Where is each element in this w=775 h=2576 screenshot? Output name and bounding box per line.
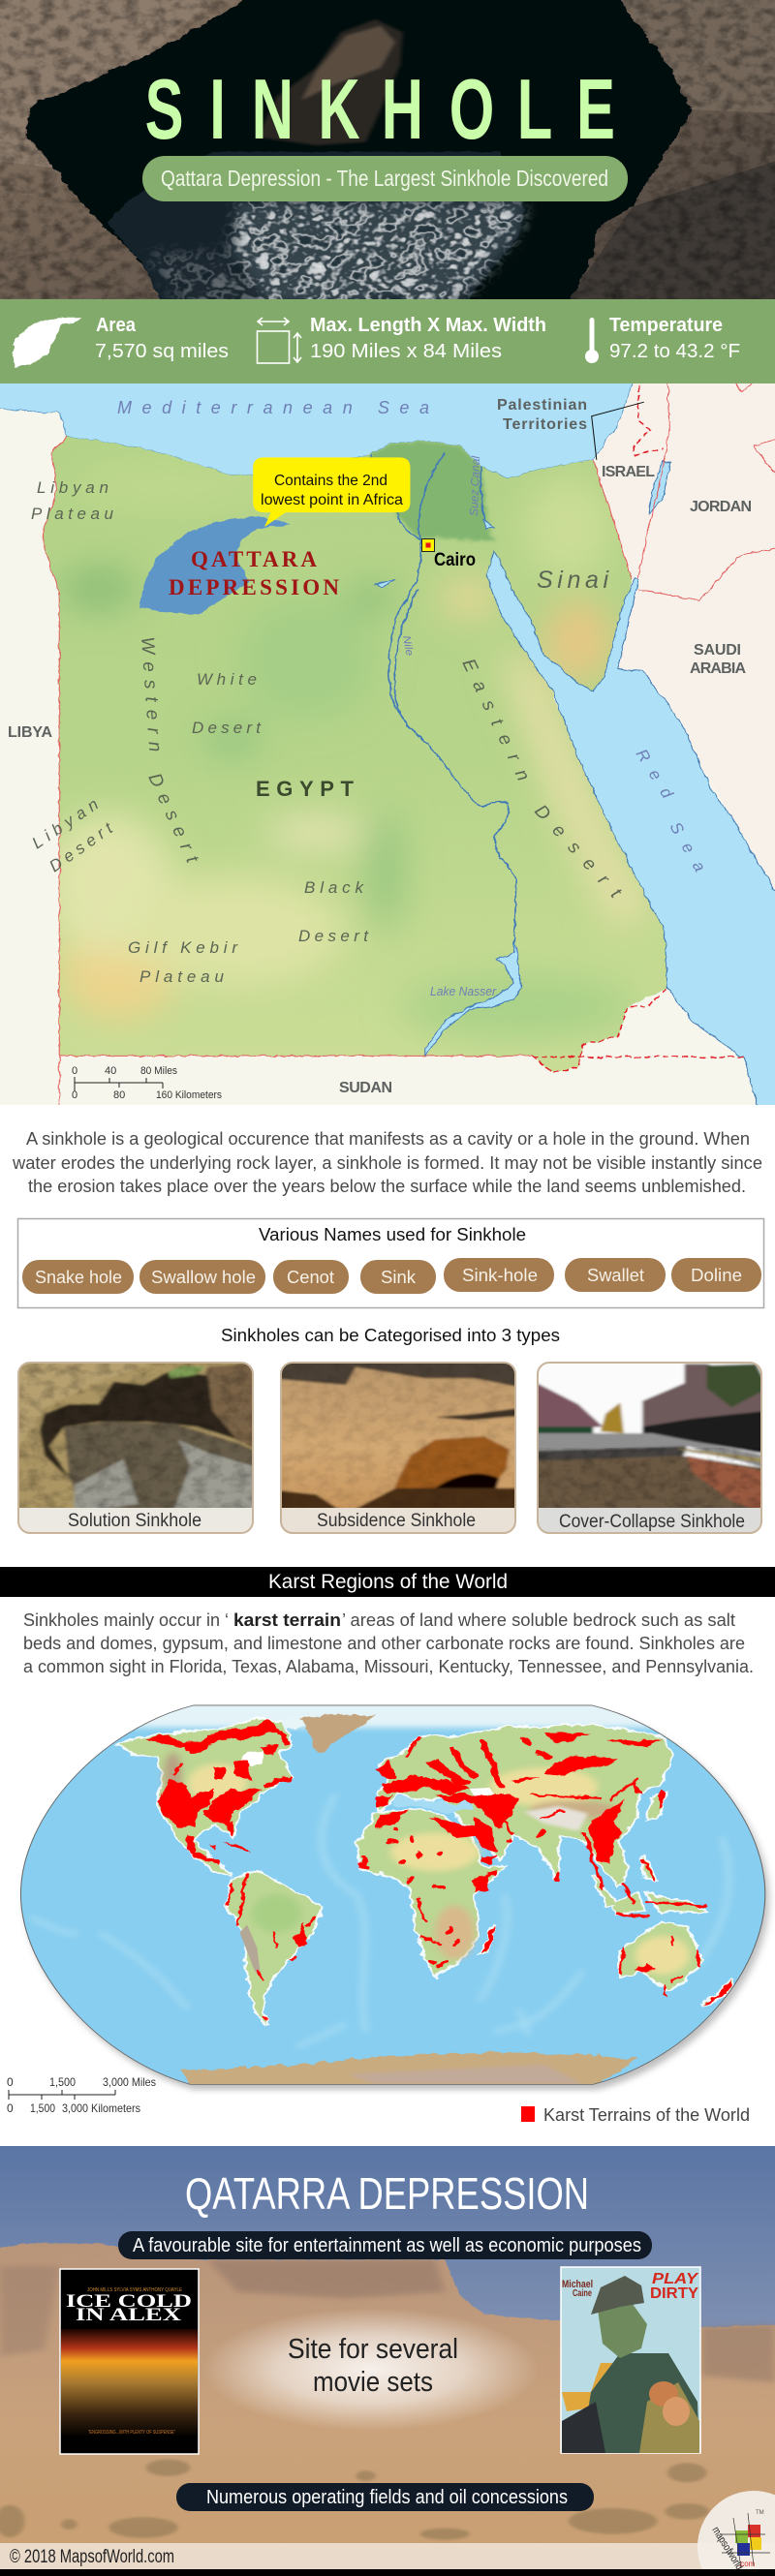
karst paragraph: ’ areas of land where soluble bedrock such as salt [342,1610,735,1630]
map labels: deserts and regions: White [197,670,257,689]
map labels: deserts and regions: Eastern [457,656,533,784]
name pills: Doline [691,1266,742,1285]
map base terrain [0,368,775,1129]
movie poster: Ice Cold in Alex: JOHN MILLS SYLVIA SYMS ANTHONY QUAYLE [87,2287,183,2293]
karst terrain red patches [143,1720,731,2018]
card: solution sinkhole [17,1362,254,1534]
map of Egypt [0,368,775,1129]
world map scale bar: 0 [7,2075,14,2089]
map labels: seas and countries: Mediterranean Sea [117,398,429,417]
karst paragraph: beds and domes, gypsum, and limestone and other carbonate rocks are found. Sinkholes are [23,1634,745,1653]
name pills: Cenot [287,1268,334,1287]
map labels: deserts and regions: Western [137,636,165,752]
name pills: Swallet [587,1266,644,1285]
map scale bar: 80 Miles [140,1065,177,1077]
map labels: deserts and regions: Sea [666,819,709,874]
movie poster: Ice Cold in Alex: ICE COLD [66,2291,192,2312]
callout: lowest point [253,457,410,527]
map scale bar: 80 [113,1089,125,1101]
map labels: deserts and regions: Nile [400,634,416,657]
map labels: seas and countries [8,397,752,1096]
name pills [22,1258,761,1294]
name pills: Swallow hole [151,1268,256,1287]
card: solution sinkhole: Solution Sinkhole [68,1511,202,1531]
footer strip: © 2018 MapsofWorld.com [10,2547,174,2567]
world map [15,1701,771,2090]
bottom bar [0,2569,775,2576]
label: Qattara Depression: QATTARA [191,547,317,571]
karst paragraph [23,1610,754,1676]
name pills: Sink [381,1268,417,1287]
intro paragraph: the erosion takes place over the years below the surface while the land seems unblemished. [28,1177,746,1196]
world map scale bar [7,2075,156,2115]
label: Qattara Depression [169,547,339,599]
names heading: Various Names used for Sinkhole [259,1225,526,1244]
map labels: deserts and regions: Red [633,746,677,802]
movie poster: Play Dirty: DIRTY [650,2285,698,2302]
logo: Maps of World: TM [756,2510,764,2516]
world map scale bar: 1,500 [30,2101,55,2115]
subtitle pill [142,156,628,201]
map labels: deserts and regions: Black [304,878,364,897]
map scale bar: 160 Kilometers [156,1089,222,1101]
map labels: deserts and regions: Desert [192,719,262,737]
card: subsidence sinkhole [280,1362,516,1534]
temperature stat: Temperature [609,315,723,336]
map scale bar: 0 [72,1089,78,1101]
map scale bar: 40 [105,1065,116,1077]
intro paragraph: A sinkhole is a geological occurence that manifests as a cavity or a hole in the ground. When [26,1129,750,1149]
pill: oil concessions: Numerous operating fields and oil concessions [206,2487,568,2508]
size stat [310,315,546,362]
temperature stat: 97.2 to 43.2 °F [609,341,740,362]
logo: Maps of World [698,2491,775,2576]
size stat: Max. Length X Max. Width [310,315,546,336]
map labels: seas and countries: Palestinian [497,397,587,414]
section header: karst regions: Karst Regions of the World [268,1571,508,1593]
movie poster: Ice Cold in Alex: "ENGROSSING...WITH PLENTY OF SUSPENSE" [88,2430,175,2436]
card: cover-collapse sinkhole [537,1362,762,1534]
map labels: deserts and regions: Libyan [29,795,102,852]
footer strip [0,2543,775,2569]
karst paragraph: a common sight in Florida, Texas, Alabama, Missouri, Kentucky, Tennessee, and Pennsylvania. [23,1657,754,1676]
map labels: deserts and regions: Desert [530,801,626,903]
pill: favourable site: A favourable site for entertainment as well as economic purposes [133,2235,641,2256]
map labels: deserts and regions: Desert [46,818,117,875]
panel: various names [17,1218,763,1307]
map labels: seas and countries: SAUDI [694,642,741,659]
map labels: seas and countries: LIBYA [8,724,52,741]
size stat: 190 Miles x 84 Miles [310,341,502,362]
map scale bar [72,1065,222,1101]
icon: thermometer [585,318,599,363]
pill: favourable site [118,2231,652,2259]
movie poster: Play Dirty [561,2267,700,2453]
map labels: seas and countries: SUDAN [339,1080,392,1096]
world map scale bar: 3,000 Miles [103,2075,156,2089]
map scale bar: 0 [72,1065,78,1077]
leader line: Palestinian Territories [592,402,644,460]
movie poster: Ice Cold in Alex: IN ALEX [76,2305,181,2325]
movie poster: Ice Cold in Alex [60,2269,199,2454]
map labels: seas and countries: ISRAEL [602,464,655,480]
section header: karst regions [0,1567,775,1597]
movie poster: Play Dirty: Michael [562,2279,593,2290]
hero photo: sinkhole from above [0,0,775,313]
marker: Cairo: Cairo [434,550,476,570]
temperature stat [609,315,740,362]
map labels: deserts and regions: Plateau [31,505,114,523]
map labels: seas and countries: EGYPT [256,777,355,801]
map labels: deserts and regions: Plateau [140,967,225,986]
panel: Qatarra Depression [0,2146,775,2576]
card: subsidence sinkhole: Subsidence Sinkhole [317,1511,476,1531]
title: SINKHOLE [145,61,615,157]
intro paragraph [12,1129,762,1196]
area stat [95,315,229,362]
map labels: deserts and regions: Suez Canal [467,455,482,516]
world map scale bar: 3,000 Kilometers [62,2101,140,2115]
map labels: deserts and regions: Sinai [537,567,609,594]
hero panel [0,0,775,313]
movie poster: Play Dirty: PLAY [652,2271,699,2287]
movie poster: Play Dirty: Caine [573,2288,592,2299]
section title: QATARRA DEPRESSION [185,2168,589,2219]
marker: Cairo [422,538,476,570]
karst paragraph: karst terrain [233,1610,341,1630]
desert background [0,2146,775,2574]
logo: Maps of World: .com [738,2560,756,2568]
intro paragraph: water erodes the underlying rock layer, a sinkhole is formed. It may not be visible instantly since [12,1153,762,1173]
karst paragraph: Sinkholes mainly occur in ‘ [23,1610,229,1630]
map labels: deserts and regions: Gilf Kebir [128,938,238,957]
map labels: deserts and regions: Libyan [37,478,108,497]
area stat: 7,570 sq miles [95,341,229,362]
icon: area shape [13,318,83,367]
callout: lowest point: lowest point in Africa [261,492,403,508]
legend: karst terrains: Karst Terrains of the World [543,2105,750,2125]
world map scale bar: 1,500 [49,2075,76,2089]
world map scale bar: 0 [7,2101,14,2115]
map labels: seas and countries: JORDAN [690,499,752,515]
label: Qattara Depression: DEPRESSION [169,575,339,599]
text: movie sets [288,2334,458,2398]
map labels: deserts and regions: Lake Nasser [430,984,497,998]
name pills: Snake hole [35,1268,122,1287]
area stat: Area [96,315,137,336]
map labels: deserts and regions: Desert [143,770,202,867]
pill: oil concessions [176,2483,594,2511]
map labels: seas and countries: ARABIA [690,660,746,677]
text: movie sets: Site for several [288,2334,458,2365]
types heading: Sinkholes can be Categorised into 3 types [221,1326,560,1345]
callout: lowest point: Contains the 2nd [274,473,388,489]
map labels: deserts and regions: Desert [298,927,369,945]
map labels: deserts and regions [29,455,709,998]
text: movie sets: movie sets [313,2367,433,2398]
name pills: Sink-hole [462,1266,538,1285]
subtitle pill: Qattara Depression - The Largest Sinkhole Discovered [161,166,608,191]
stats band [0,299,775,383]
card: cover-collapse sinkhole: Cover-Collapse Sinkhole [559,1512,745,1532]
map labels: seas and countries: Territories [503,416,587,433]
icon: length and width [258,318,301,363]
